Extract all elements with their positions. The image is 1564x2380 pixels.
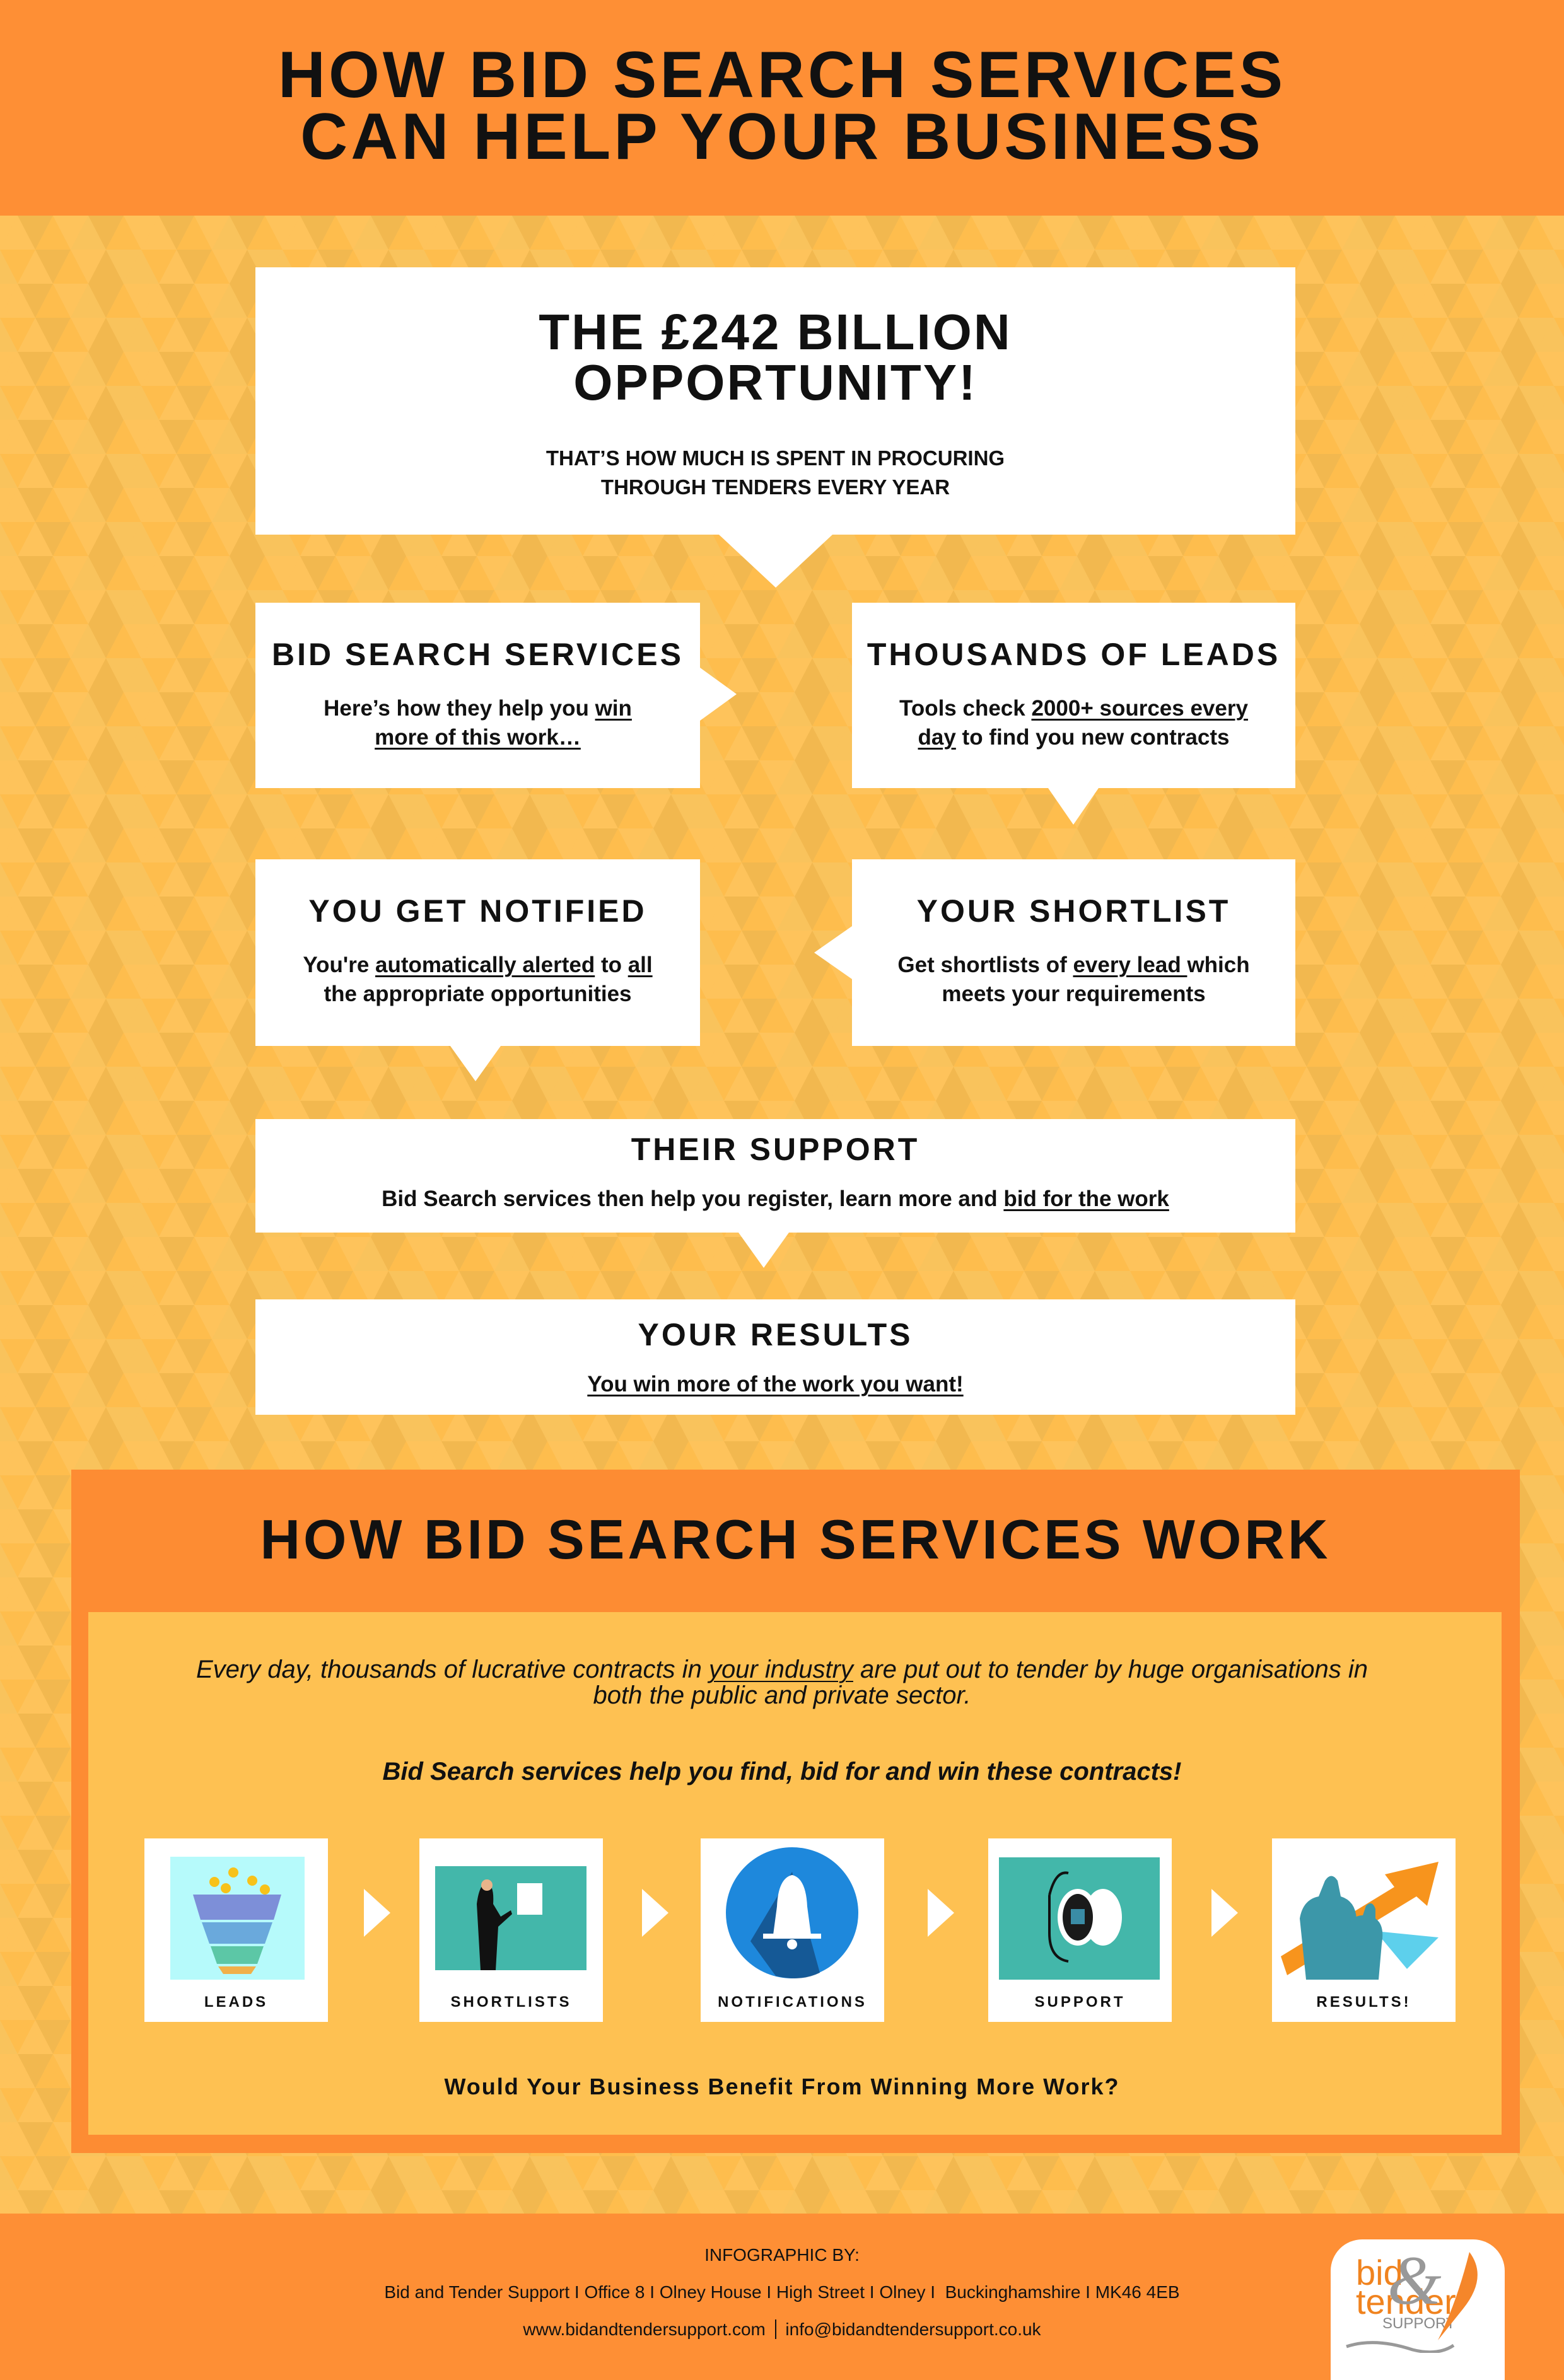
bold italic tagline: Bid Search services help you find, bid for and win these contracts! [383,1758,1181,1785]
logo: bid [1356,2253,1403,2292]
section heading: HOW BID SEARCH SERVICES WORK [260,1508,1331,1570]
label: RESULTS! [1316,1994,1411,2011]
title: CAN HELP YOUR BUSINESS [300,100,1264,173]
logo [1331,2239,1505,2380]
panel: thousands of leads [852,603,1295,788]
footer text: INFOGRAPHIC BY: [704,2245,860,2265]
title: HOW BID SEARCH SERVICES [278,38,1286,112]
panel: thousands of leads: THOUSANDS OF LEADS [867,637,1280,672]
panel: you get notified [255,859,700,1046]
footer [0,2214,1564,2380]
footer text: Bid and Tender Support I Office 8 I Olney House I High Street I Olney I Buckinghamshire I MK46 4EB [384,2282,1180,2302]
panel: you get notified: You're automatically alerted to all [303,953,653,977]
label: LEADS [204,1994,268,2011]
header [0,0,1564,216]
label: SUPPORT [1034,1994,1125,2011]
panel: your results: YOUR RESULTS [638,1317,913,1352]
card: shortlists [419,1838,603,2022]
panel: you get notified: YOU GET NOTIFIED [308,893,647,929]
logo: SUPPORT [1382,2315,1456,2332]
panel: their support: Bid Search services then help you register, learn more and bid for the work [382,1187,1169,1211]
panel: bid search services: more of this work… [375,725,581,750]
intro text [196,1656,1368,1709]
card: support [988,1838,1172,2022]
section: how bid search services work [71,1470,1520,2153]
inner panel [88,1612,1502,2135]
panel: thousands of leads: Tools check 2000+ sources every [899,696,1248,721]
question text: Would Your Business Benefit From Winning More Work? [444,2074,1120,2099]
panel: £242 billion opportunity: OPPORTUNITY! [573,354,978,410]
footer text: www.bidandtendersupport.com info@bidandtendersupport.co.uk [523,2319,1041,2339]
panel: £242 billion opportunity: THAT’S HOW MUCH IS SPENT IN PROCURING [546,446,1005,470]
intro text: Every day, thousands of lucrative contracts in your industry are put out to tender by huge organisations in [196,1656,1368,1683]
arrow [928,1889,954,1937]
title [278,38,1286,173]
label: SHORTLISTS [450,1994,571,2011]
footer text [384,2245,1180,2339]
panel: bid search services: Here’s how they help you win [324,696,632,721]
logo: & [1387,2242,1442,2319]
panel: you get notified: the appropriate opportunities [324,982,632,1006]
panel: your results: You win more of the work you want! [587,1372,964,1396]
panel: your shortlist: Get shortlists of every lead which [897,953,1250,977]
panel: thousands of leads: day to find you new contracts [918,725,1229,750]
panel: £242 billion opportunity [255,267,1295,535]
panel: your results [255,1299,1295,1415]
card: leads [144,1838,328,2022]
logo: tender [1356,2282,1456,2321]
panel: bid search services: BID SEARCH SERVICES [272,637,684,672]
panel: bid search services [255,603,700,788]
panel: their support: THEIR SUPPORT [631,1132,919,1167]
panel: their support [255,1119,1295,1233]
card: notifications [701,1838,884,2022]
panel: £242 billion opportunity: THROUGH TENDERS EVERY YEAR [601,475,950,499]
arrow [642,1889,668,1937]
label: NOTIFICATIONS [718,1994,867,2011]
panel: your shortlist: meets your requirements [942,982,1206,1006]
intro text: both the public and private sector. [593,1681,971,1709]
card: results [1272,1838,1456,2022]
panel: your shortlist: YOUR SHORTLIST [917,893,1230,929]
arrow [364,1889,390,1937]
panel: your shortlist [852,859,1295,1046]
arrow [1211,1889,1238,1937]
panel: £242 billion opportunity: THE £242 BILLION [539,304,1012,360]
